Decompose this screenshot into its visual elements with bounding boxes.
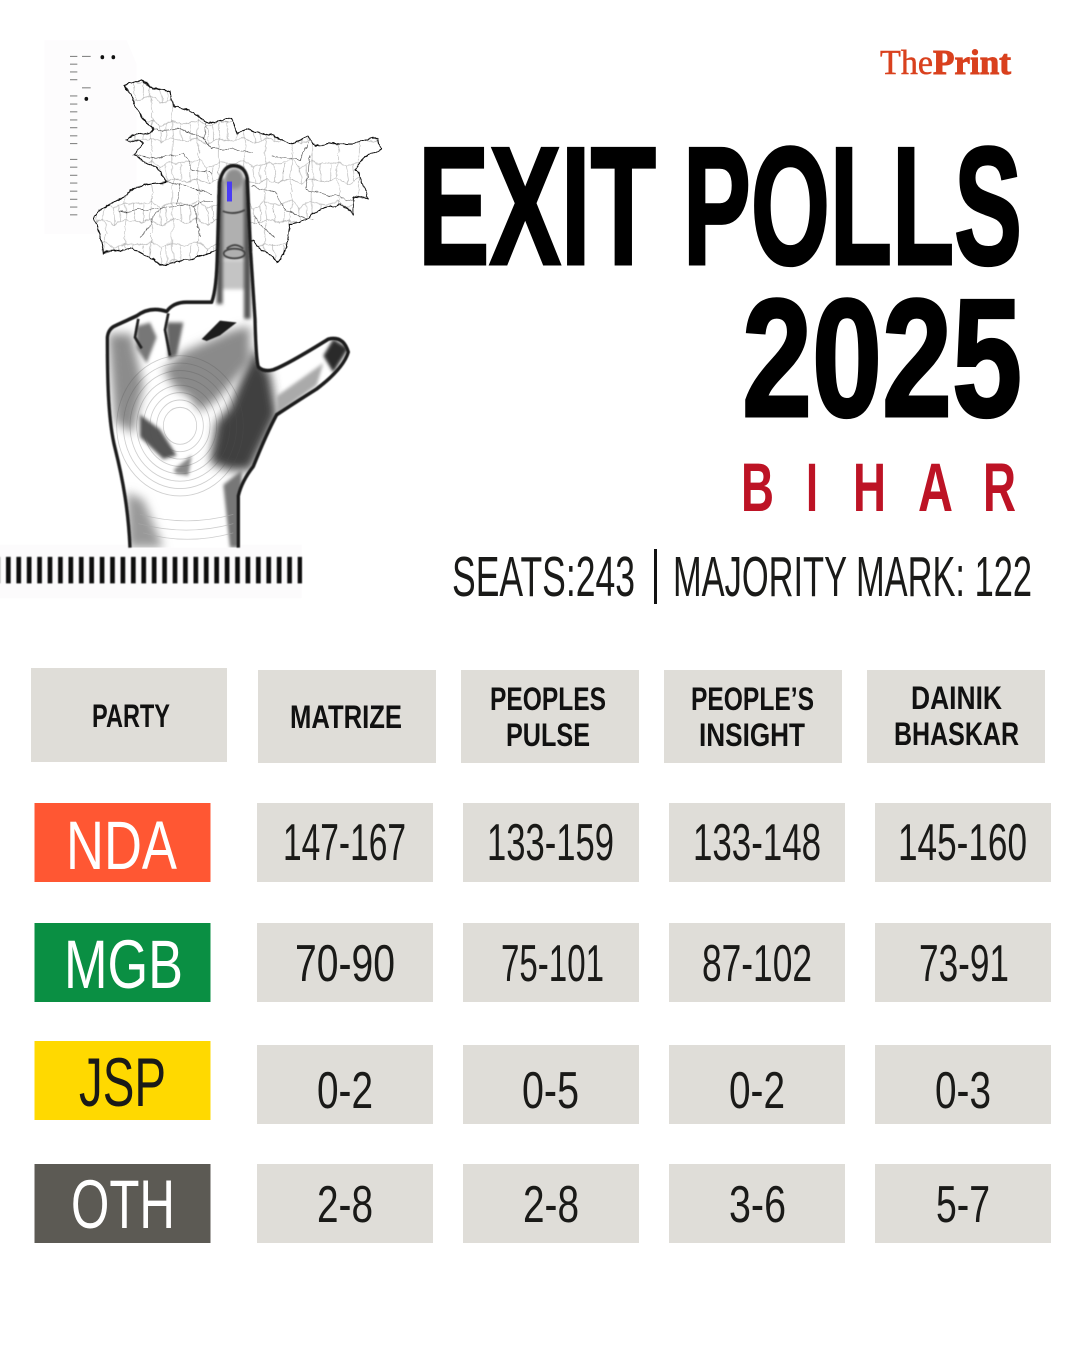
value: NDA Matrize: 147-167: [283, 814, 406, 872]
value: MGB Peoples Pulse: [463, 923, 639, 1002]
logo: ThePrint: The: [880, 43, 933, 82]
row: NDA: [34, 803, 1051, 884]
party label: NDA: NDA: [66, 807, 177, 884]
value: MGB Dainik Bhaskar: 73-91: [919, 935, 1009, 993]
value: JSP Peoples Pulse: [463, 1045, 639, 1124]
value: NDA People's Insight: 133-148: [693, 814, 821, 872]
header: Dainik Bhaskar: [867, 670, 1045, 763]
header: party: [31, 668, 227, 762]
faint legend panel: [44, 40, 137, 234]
value: OTH Peoples Pulse: [463, 1164, 639, 1243]
party label: JSP: JSP: [79, 1044, 166, 1121]
header: Matrize: [258, 670, 436, 763]
illustration: hand pointing over Bihar map: [0, 40, 381, 598]
row: OTH: [34, 1164, 1051, 1243]
value: OTH Peoples Pulse: 2-8: [523, 1176, 579, 1234]
header: Peoples Pulse: [461, 670, 639, 763]
value: OTH People's Insight: 3-6: [729, 1176, 786, 1234]
value: OTH Matrize: 2-8: [317, 1176, 373, 1234]
header: Peoples Pulse: PULSE: [506, 717, 590, 753]
value: OTH Matrize: [257, 1164, 433, 1243]
value: NDA Dainik Bhaskar: [875, 803, 1051, 882]
seats and majority mark: [452, 545, 1032, 609]
value: MGB Peoples Pulse: 75-101: [501, 935, 604, 993]
value: JSP Dainik Bhaskar: [875, 1045, 1051, 1124]
subtitle: BIHAR: A: [918, 449, 953, 526]
header: Dainik Bhaskar: DAINIK: [911, 680, 1002, 716]
party label: MGB: MGB: [64, 926, 183, 1003]
value: MGB People's Insight: [669, 923, 845, 1002]
subtitle: BIHAR: H: [853, 449, 886, 526]
hand illustration: [107, 166, 348, 548]
Bihar map: [93, 80, 381, 265]
row: MGB: [34, 923, 1051, 1003]
header: People's Insight: PEOPLE’S: [691, 681, 814, 717]
header: Dainik Bhaskar: BHASKAR: [894, 716, 1019, 752]
header: People's Insight: [664, 670, 842, 763]
value: MGB Dainik Bhaskar: [875, 923, 1051, 1002]
subtitle: BIHAR: I: [806, 449, 818, 526]
value: JSP Peoples Pulse: 0-5: [522, 1062, 579, 1120]
value: JSP Dainik Bhaskar: 0-3: [935, 1062, 991, 1120]
table header row: [31, 668, 1045, 763]
title: EXIT POLLS 2025: EXIT: [418, 112, 656, 300]
value: NDA Matrize: [257, 803, 433, 882]
value: MGB Matrize: 70-90: [295, 935, 395, 993]
value: MGB People's Insight: 87-102: [702, 935, 812, 993]
title: EXIT POLLS 2025: [418, 112, 1022, 452]
header: party: PARTY: [92, 698, 170, 734]
blue ink mark: [227, 182, 232, 201]
party label: JSP: [34, 1041, 210, 1121]
header: People's Insight: INSIGHT: [699, 717, 805, 753]
seats and majority mark: SEATS:243: [452, 545, 635, 609]
value: JSP People's Insight: 0-2: [729, 1062, 785, 1120]
barcode strip: [0, 545, 302, 598]
value: MGB Matrize: [257, 923, 433, 1002]
value: OTH Dainik Bhaskar: [875, 1164, 1051, 1243]
value: OTH Dainik Bhaskar: 5-7: [936, 1176, 990, 1234]
value: JSP Matrize: [257, 1045, 433, 1124]
value: JSP Matrize: 0-2: [317, 1062, 373, 1120]
value: NDA Peoples Pulse: [463, 803, 639, 882]
value: NDA People's Insight: [669, 803, 845, 882]
row: JSP: [34, 1041, 1051, 1124]
subtitle: BIHAR: [741, 449, 1016, 526]
value: NDA Peoples Pulse: 133-159: [487, 814, 614, 872]
party label: OTH: OTH: [71, 1166, 175, 1243]
header: Matrize: MATRIZE: [290, 699, 402, 735]
header: Peoples Pulse: PEOPLES: [490, 681, 606, 717]
logo: ThePrint: [880, 43, 1011, 82]
value: JSP People's Insight: [669, 1045, 845, 1124]
subtitle: BIHAR: R: [983, 449, 1016, 526]
subtitle: BIHAR: B: [741, 449, 774, 526]
value: OTH People's Insight: [669, 1164, 845, 1243]
logo: ThePrint: Print: [933, 43, 1011, 82]
